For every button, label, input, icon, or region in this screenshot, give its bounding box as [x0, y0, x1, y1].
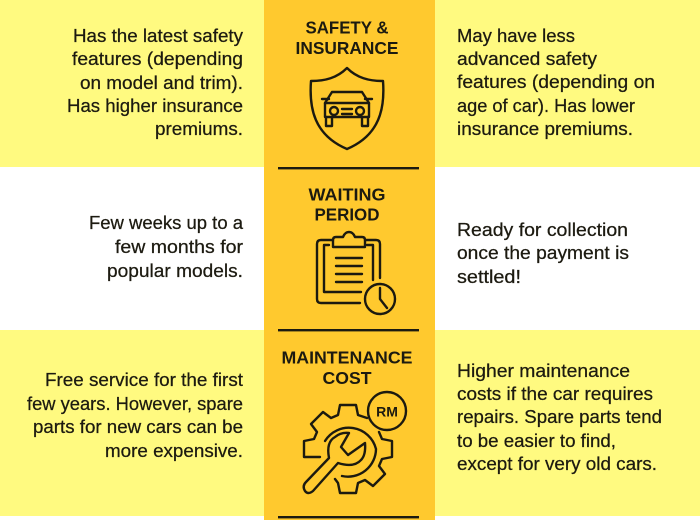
left text: waiting period [89, 213, 244, 281]
left text: safety and insurance: features (depending [72, 49, 243, 69]
centre column [264, 0, 435, 520]
right text: waiting period: Ready for collection [457, 220, 628, 240]
left text: safety and insurance: on model and trim). [80, 73, 243, 93]
right text: maintenance cost: except for very old cars. [457, 454, 657, 474]
right text: maintenance cost: to be easier to find, [457, 431, 616, 451]
right text: safety and insurance: advanced safety [457, 49, 597, 69]
left text: safety and insurance: premiums. [155, 119, 243, 139]
left text: maintenance cost [27, 370, 243, 461]
left text: maintenance cost: more expensive. [105, 441, 243, 461]
left text: safety and insurance [67, 26, 243, 139]
icon: gear with wrench and RM badge [304, 392, 406, 493]
heading: waiting period: PERIOD [314, 204, 380, 224]
right text: waiting period [457, 220, 629, 287]
right text: safety and insurance: features (depending on [457, 72, 655, 92]
left text: waiting period: popular models. [107, 261, 243, 281]
left text: waiting period: few months for [115, 237, 243, 257]
right text: maintenance cost [457, 361, 662, 474]
icon: gear with wrench and RM badge: RM [376, 404, 398, 420]
heading: maintenance cost: MAINTENANCE [282, 348, 412, 368]
icon: shield with car [311, 68, 383, 149]
right text: maintenance cost: repairs. Spare parts tend [457, 407, 662, 427]
heading: safety and insurance: INSURANCE [296, 38, 398, 58]
right text: safety and insurance: age of car). Has lower [457, 96, 635, 116]
right text: safety and insurance: insurance premiums. [457, 119, 633, 139]
row band: waiting period [0, 167, 700, 330]
heading: waiting period [308, 184, 386, 224]
heading: safety and insurance [296, 18, 398, 58]
right text: safety and insurance [457, 26, 655, 139]
right text: maintenance cost: costs if the car requires [457, 384, 653, 404]
row band: maintenance cost [0, 330, 700, 516]
left text: maintenance cost: few years. However, spare [27, 394, 243, 414]
left text: safety and insurance: Has higher insurance [67, 96, 243, 116]
right text: waiting period: settled! [457, 267, 521, 287]
left text: waiting period: Few weeks up to a [89, 213, 244, 233]
right text: maintenance cost: Higher maintenance [457, 361, 630, 381]
heading: maintenance cost [282, 348, 412, 388]
heading: waiting period: WAITING [308, 184, 386, 204]
row band: safety and insurance [0, 0, 700, 167]
left text: maintenance cost: Free service for the first [45, 370, 243, 390]
right text: safety and insurance: May have less [457, 26, 575, 46]
heading: maintenance cost: COST [322, 368, 372, 388]
icon: clipboard with clock [317, 232, 395, 314]
left text: maintenance cost: parts for new cars can be [33, 417, 243, 437]
heading: safety and insurance: SAFETY & [306, 18, 389, 38]
right text: waiting period: once the payment is [457, 243, 629, 263]
left text: safety and insurance: Has the latest safety [73, 26, 243, 46]
